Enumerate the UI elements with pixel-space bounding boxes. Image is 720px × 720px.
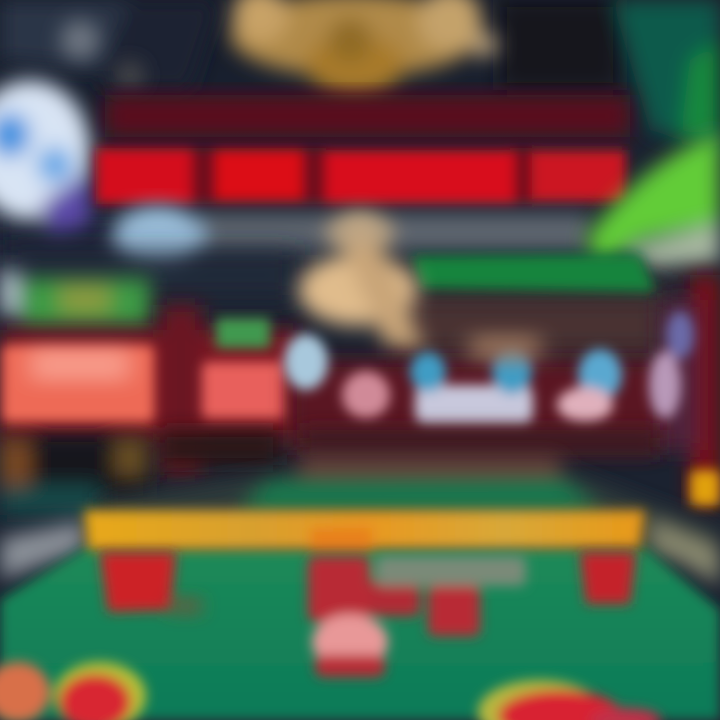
machine screens: blue and white xyxy=(284,311,694,425)
chandelier: lower glowing xyxy=(298,214,425,350)
chandelier: gold top xyxy=(230,0,498,95)
middle left green sign xyxy=(216,318,270,348)
yellow accent right xyxy=(690,470,720,506)
left green sign xyxy=(0,270,150,328)
stacked chips centre xyxy=(308,556,526,677)
banner: bright red segments xyxy=(96,148,626,204)
top right green wall xyxy=(612,0,720,150)
banner: dark red upper band xyxy=(105,95,630,137)
machines row background xyxy=(290,275,720,505)
red cup right xyxy=(580,552,636,604)
green bar xyxy=(412,254,656,292)
wall behind machines xyxy=(0,255,670,360)
ceiling lamps xyxy=(60,20,144,89)
middle salmon screen xyxy=(202,362,286,420)
green canopy right xyxy=(585,132,720,268)
dark machine bases xyxy=(0,430,660,515)
table rail: yellow band xyxy=(84,510,645,552)
carpet floor xyxy=(0,458,720,585)
sign: left white and blue screen xyxy=(0,80,90,235)
dark red wall left xyxy=(0,305,300,475)
bottom right chips xyxy=(478,680,661,720)
bottom left chips xyxy=(0,662,146,720)
game table: green felt xyxy=(0,548,720,720)
red cup left xyxy=(100,552,200,614)
left salmon screen xyxy=(2,345,154,423)
grey band under banner xyxy=(112,206,590,266)
